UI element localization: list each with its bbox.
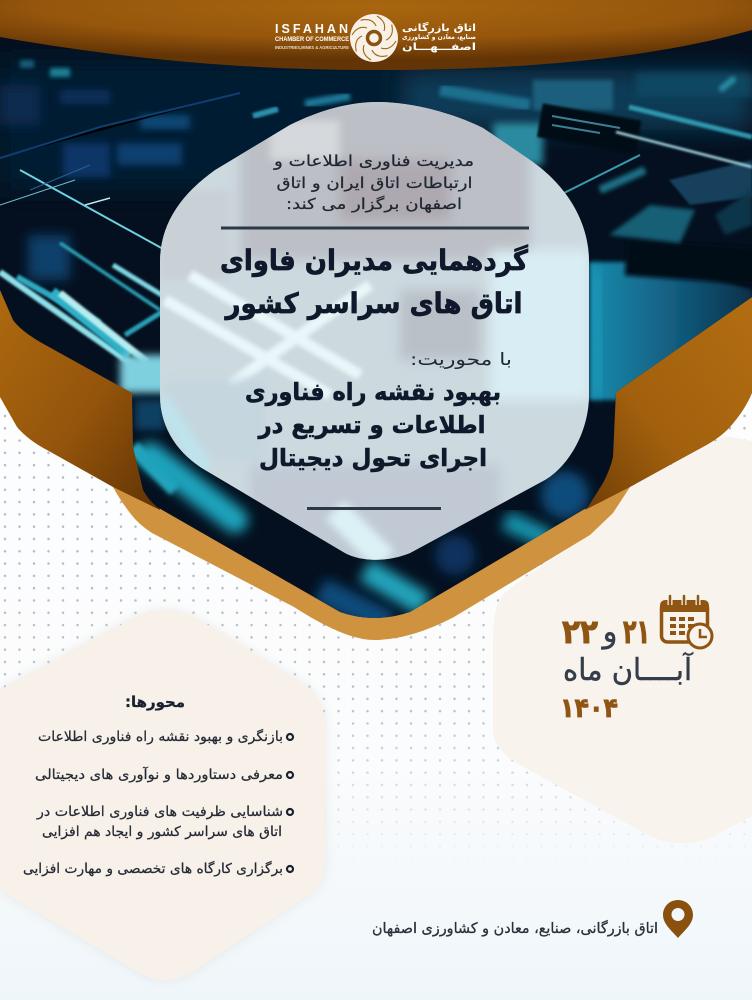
date year: ۱۴۰۴ [560,693,618,724]
logo persian wordmark [402,21,476,53]
logo: Isfahan chamber of commerce [275,14,476,62]
topic list text: شناسایی ظرفیت های فناوری اطلاعات در [36,804,283,820]
intro text [273,152,474,213]
brown right wing [585,292,752,510]
topic text [245,378,501,472]
date month: آبــــان ماه [563,652,694,688]
main title: گردهمایی مدیران فاوای [220,244,529,277]
hexagon translucent shape [150,95,600,565]
panel: date [560,596,712,724]
topic list text [23,728,283,877]
panel: central hexagon [150,95,600,565]
date days: ۲۲ [562,612,598,651]
topics heading: محورها: [125,693,185,711]
logo english wordmark: CHAMBER OF COMMERCE [275,36,350,43]
logo persian wordmark: اتاق بازرگانی [402,21,476,34]
logo english wordmark: ISFAHAN [275,22,348,36]
topic text: اطلاعات و تسریع در [258,411,486,439]
logo persian wordmark: صنایع، معادن و کشاورزی [402,33,476,41]
topics hexagon [0,610,325,980]
dotted background pattern [0,400,752,870]
topic text: بهبود نقشه راه فناوری [245,378,501,406]
date conjunction: و [601,614,617,650]
address text: اتاق بازرگانی، صنایع، معادن و کشاورزی اصفهان [372,920,658,937]
logo english wordmark [275,22,350,50]
panel: date background shape [493,436,752,844]
subtitle label: با محوریت: [410,350,512,370]
panel: topics [0,610,325,980]
topic list text: برگزاری کارگاه های تخصصی و مهارت افزایی [23,860,283,877]
date days: ۲۱ [623,612,650,651]
topic list text: بازنگری و بهبود نقشه راه فناوری اطلاعات [38,728,283,745]
intro text: مدیریت فناوری اطلاعات و [273,152,474,170]
topic bullets [287,734,293,872]
orange layered shape [112,470,630,640]
logo persian wordmark: اصفـــهـــان [402,42,476,53]
icon: map pin [663,900,693,938]
intro text: اصفهان برگزار می کند: [286,195,462,213]
topic list text: معرفی دستاوردها و نوآوری های دیجیتالی [35,766,283,783]
topic text: اجرای تحول دیجیتال [259,444,487,472]
main title: اتاق های سراسر کشور [224,287,522,320]
brown left wing [0,285,160,510]
logo english wordmark: INDUSTRIES,MINES & AGRICULTURE [275,45,349,50]
divider under intro [221,226,529,230]
main title [220,244,529,320]
divider lower [307,507,441,510]
logo emblem [350,14,398,62]
topics hexagon shadow [0,610,325,980]
location [372,900,693,938]
top brown band with logo background [0,0,752,70]
date days [562,612,650,651]
intro text: ارتباطات اتاق ایران و اتاق [276,174,472,192]
topic list text: اتاق های سراسر کشور و ایجاد هم افزایی [42,824,282,840]
icon: calendar with clock [660,596,712,648]
circuit board photo [0,20,752,640]
